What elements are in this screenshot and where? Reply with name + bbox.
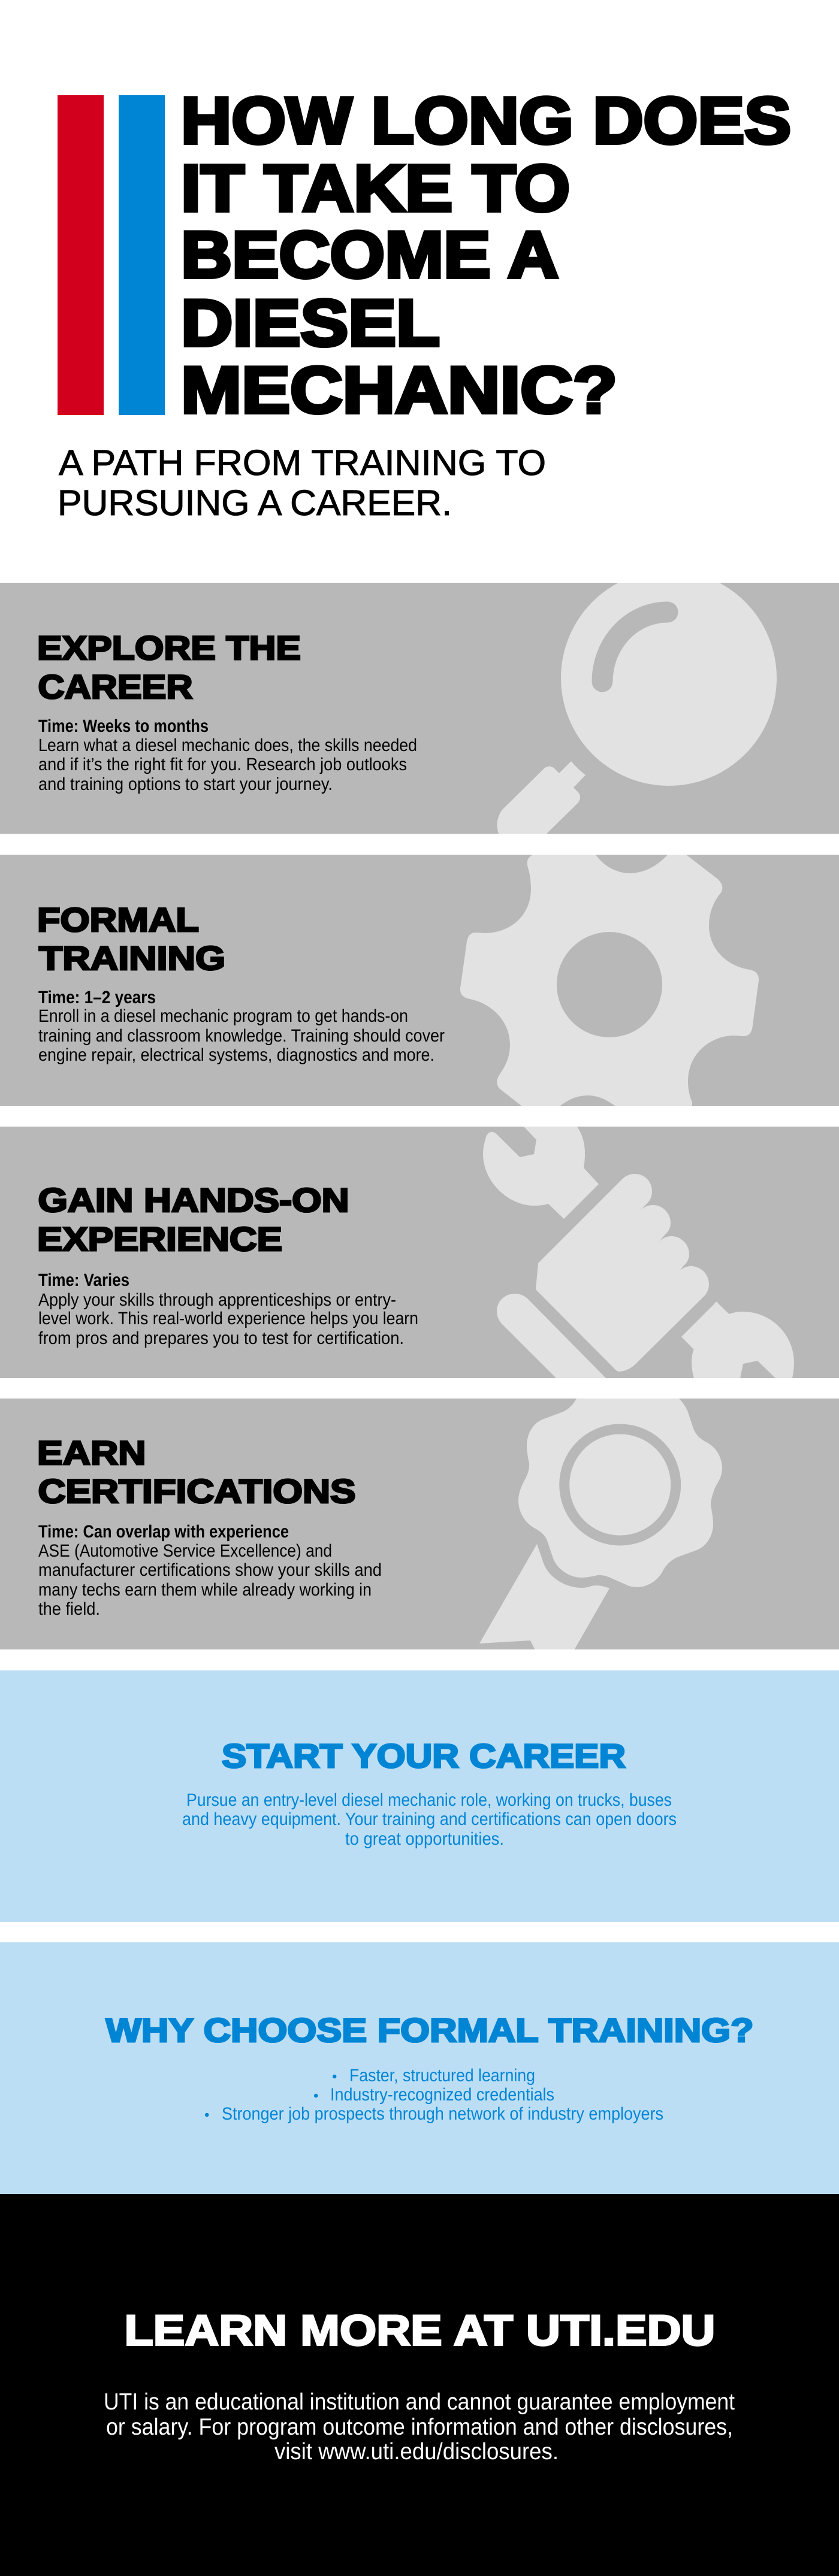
panel: earn certifications (0, 1399, 839, 1650)
title: IT TAKE TO (181, 152, 570, 225)
text: explore the career: Learn what a diesel mechanic does, the skills needed (38, 735, 417, 755)
text: formal training (38, 988, 445, 1065)
icon: magnifying glass (497, 570, 777, 834)
panel: footer call to action (0, 2194, 839, 2576)
text: start your career (182, 1790, 677, 1849)
heading: formal training: FORMAL (37, 901, 199, 939)
icon: award ribbon badge (479, 1399, 722, 1650)
text: explore the career: Time: Weeks to months (38, 716, 209, 736)
title: MECHANIC? (181, 353, 617, 427)
title: BECOME A (181, 218, 559, 292)
list: benefits of formal training: • (332, 2069, 337, 2085)
text: earn certifications (38, 1522, 382, 1619)
text: earn certifications: ASE (Automotive Service Excellence) and (38, 1541, 332, 1561)
list: benefits of formal training: Stronger job prospects through network of industry employers (222, 2104, 663, 2124)
text: explore the career: and if it’s the right fit for you. Research job outlooks (38, 755, 407, 774)
panel: start your career (0, 1670, 839, 1922)
text: hands-on experience: from pros and prepares you to test for certification. (38, 1328, 404, 1348)
text: explore the career (38, 716, 417, 794)
text: earn certifications: Time: Can overlap with experience (38, 1522, 289, 1542)
text: hands-on experience: Apply your skills through apprenticeships or entry- (38, 1290, 396, 1310)
text: hands-on experience (38, 1270, 418, 1348)
text: start your career: to great opportunities. (345, 1829, 504, 1849)
text: formal training: training and classroom knowledge. Training should cover (38, 1026, 445, 1046)
list: benefits of formal training: Faster, structured learning (349, 2066, 535, 2085)
heading: explore the career: EXPLORE THE (37, 629, 301, 667)
panel: why choose formal training (0, 1942, 839, 2194)
text: disclaimer: visit www.uti.edu/disclosures. (274, 2439, 559, 2465)
icon: hand holding wrench (483, 1127, 794, 1378)
heading: hands-on experience: EXPERIENCE (37, 1220, 282, 1258)
text: disclaimer (104, 2389, 735, 2465)
text: start your career: Pursue an entry-level diesel mechanic role, working on trucks, buses (186, 1790, 672, 1810)
heading: formal training: TRAINING (39, 939, 225, 977)
header accent stripes (58, 95, 165, 415)
heading: hands-on experience (37, 1181, 349, 1258)
text: formal training: Time: 1–2 years (38, 988, 156, 1007)
text: earn certifications: many techs earn them while already working in (38, 1580, 372, 1600)
text: disclaimer: UTI is an educational institution and cannot guarantee employment (104, 2389, 735, 2415)
text: formal training: Enroll in a diesel mechanic program to get hands-on (38, 1006, 408, 1026)
text: formal training: engine repair, electrical systems, diagnostics and more. (38, 1045, 434, 1065)
title: DIESEL (181, 286, 440, 360)
panel: formal training (0, 855, 839, 1106)
heading: formal training (37, 901, 225, 977)
subtitle: PURSUING A CAREER. (58, 483, 452, 523)
text: earn certifications: manufacturer certifications show your skills and (38, 1560, 382, 1580)
list: benefits of formal training (204, 2066, 663, 2124)
icon: gear (460, 855, 759, 1106)
heading: explore the career (37, 629, 301, 706)
title (181, 84, 791, 427)
heading: hands-on experience: GAIN HANDS-ON (38, 1181, 349, 1219)
heading: learn more: LEARN MORE AT UTI.EDU (125, 2307, 716, 2355)
text: hands-on experience: Time: Varies (38, 1270, 129, 1290)
list: benefits of formal training: • (204, 2107, 209, 2123)
heading: explore the career: CAREER (38, 668, 193, 706)
list: benefits of formal training: • (313, 2088, 318, 2104)
list: benefits of formal training: Industry-recognized credentials (330, 2085, 554, 2105)
text: start your career: and heavy equipment. Your training and certifications can open doors (182, 1809, 677, 1829)
heading: earn certifications: EARN (37, 1434, 146, 1472)
panel: explore the career (0, 570, 839, 834)
heading: earn certifications (37, 1434, 356, 1510)
text: explore the career: and training options to start your journey. (38, 774, 333, 794)
heading: earn certifications: CERTIFICATIONS (38, 1472, 356, 1510)
heading: start your career: START YOUR CAREER (222, 1737, 626, 1775)
panel: hands-on experience (0, 1127, 839, 1378)
text: hands-on experience: level work. This real-world experience helps you learn (38, 1309, 418, 1328)
title: HOW LONG DOES (181, 84, 791, 158)
heading: why choose formal training: WHY CHOOSE FORMAL TRAINING? (105, 2011, 754, 2049)
text: earn certifications: the field. (38, 1599, 100, 1619)
subtitle: A PATH FROM TRAINING TO (59, 443, 546, 483)
subtitle (58, 443, 546, 523)
text: disclaimer: or salary. For program outcome information and other disclosures, (106, 2414, 733, 2440)
